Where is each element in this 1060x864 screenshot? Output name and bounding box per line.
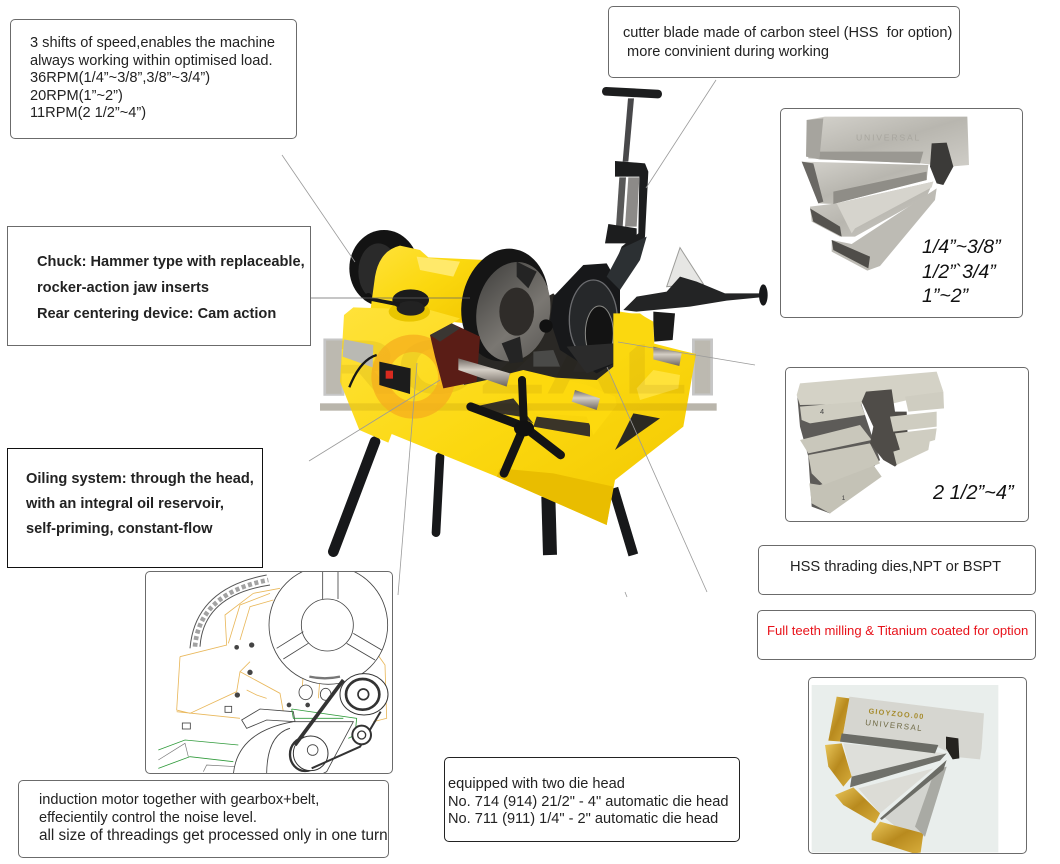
chuck text: Chuck: Hammer type with replaceable, — [37, 254, 305, 270]
cutter blade text: more convinient during working — [627, 44, 829, 60]
induction motor text: all size of threadings get processed only in one turn — [39, 827, 388, 844]
chuck text — [37, 254, 305, 322]
oiling text — [26, 471, 254, 537]
induction motor text — [39, 792, 388, 844]
speed text: 11RPM(2 1/2”~4”) — [30, 105, 146, 121]
drive belt — [295, 680, 381, 768]
cast housing outline in amber — [177, 588, 387, 722]
cutter arm with T handle — [602, 87, 662, 290]
callout: speed settings — [10, 19, 297, 139]
cutter blade text — [623, 25, 952, 60]
induction motor text: effecientily control the noise level. — [39, 810, 257, 826]
panel: die set large sizes — [785, 367, 1029, 522]
coated die set illustration — [812, 685, 998, 853]
large die set illustration — [796, 372, 944, 514]
power switch panel — [379, 362, 411, 394]
die heads text — [448, 776, 729, 827]
die heads text: equipped with two die head — [448, 776, 625, 792]
guide rails — [458, 347, 682, 410]
die size labels: 1”~2” — [922, 285, 968, 307]
callout: cutter blade — [608, 6, 960, 78]
chuck text: Rear centering device: Cam action — [37, 306, 276, 322]
front chuck — [452, 242, 558, 368]
callout: chuck — [7, 226, 311, 346]
chuck face outline — [269, 566, 388, 684]
green bracket and base outline — [158, 709, 357, 768]
maroon cover block — [430, 323, 480, 388]
callout: oiling system — [7, 448, 263, 568]
cutter blade text: cutter blade made of carbon steel (HSS for option) — [623, 25, 952, 41]
HSS text: HSS thrading dies,NPT or BSPT — [790, 559, 1001, 575]
die heads text: No. 714 (914) 21/2" - 4" automatic die head — [448, 794, 729, 810]
front lower yellow body — [340, 307, 696, 525]
coated die set illustration: GIOYZOO.00 — [868, 706, 924, 721]
speed text: 36RPM(1/4”~3/8”,3/8”~3/4”) — [30, 70, 210, 86]
induction motor text: induction motor together with gearbox+belt, — [39, 792, 319, 808]
orange logo ring — [380, 343, 447, 410]
machine legs — [333, 442, 633, 555]
coated die set illustration: UNIVERSAL — [865, 718, 923, 733]
carriage handwheel — [471, 380, 561, 473]
die size labels: 1/2”`3/4” — [922, 260, 996, 282]
die size labels — [922, 236, 1002, 307]
die size labels: 1/4”~3/8” — [922, 236, 1001, 258]
speed text — [30, 35, 275, 121]
upper housing — [370, 246, 485, 323]
die head — [533, 263, 620, 373]
upper pulley — [340, 674, 388, 715]
oiling text: self-priming, constant-flow — [26, 521, 212, 537]
bolts — [234, 642, 310, 707]
speed text: 3 shifts of speed,enables the machine — [30, 35, 275, 51]
carriage slab — [507, 370, 617, 435]
large die set illustration: 1 — [842, 495, 846, 502]
panel: titanium coated die set — [808, 677, 1027, 854]
nameplate — [343, 339, 373, 367]
speed text: 20RPM(1”~2”) — [30, 88, 123, 104]
die heads text: No. 711 (911) 1/4" - 2" automatic die head — [448, 811, 718, 827]
carriage parts — [182, 685, 331, 729]
callout: HSS threading dies — [758, 545, 1036, 595]
red option text: Full teeth milling & Titanium coated for option — [767, 623, 1028, 638]
power cable — [349, 355, 377, 387]
motor and lower pulley — [233, 722, 353, 775]
large die set illustration: 4 — [820, 407, 824, 416]
panel: belt drive diagram — [145, 571, 393, 774]
dark saddle behind rails — [463, 293, 620, 393]
rear gear ring — [190, 575, 270, 648]
die set illustration — [802, 116, 969, 271]
base frame outline — [158, 743, 237, 772]
panel: die set small sizes — [780, 108, 1023, 318]
callout: die heads — [444, 757, 740, 842]
rear chuck wheel — [349, 230, 419, 307]
chuck text: rocker-action jaw inserts — [37, 280, 209, 296]
speed text: always working within optimised load. — [30, 53, 273, 69]
die set illustration: UNIVERSAL — [856, 133, 920, 143]
callout: titanium coating option — [757, 610, 1036, 660]
oil reservoir cap with lever — [365, 289, 430, 322]
oiling text: Oiling system: through the head, — [26, 471, 254, 487]
watermark tint on body: ROZALI — [319, 324, 717, 410]
watermark logo: ROZALI — [319, 324, 717, 410]
large die size label: 2 1/2”~4” — [933, 482, 1014, 504]
idler pulley — [352, 726, 371, 744]
oiling text: with an integral oil reservoir, — [26, 496, 224, 512]
callout: induction motor — [18, 780, 389, 858]
leader lines — [282, 80, 755, 597]
reamer with translucent cone — [623, 248, 768, 342]
